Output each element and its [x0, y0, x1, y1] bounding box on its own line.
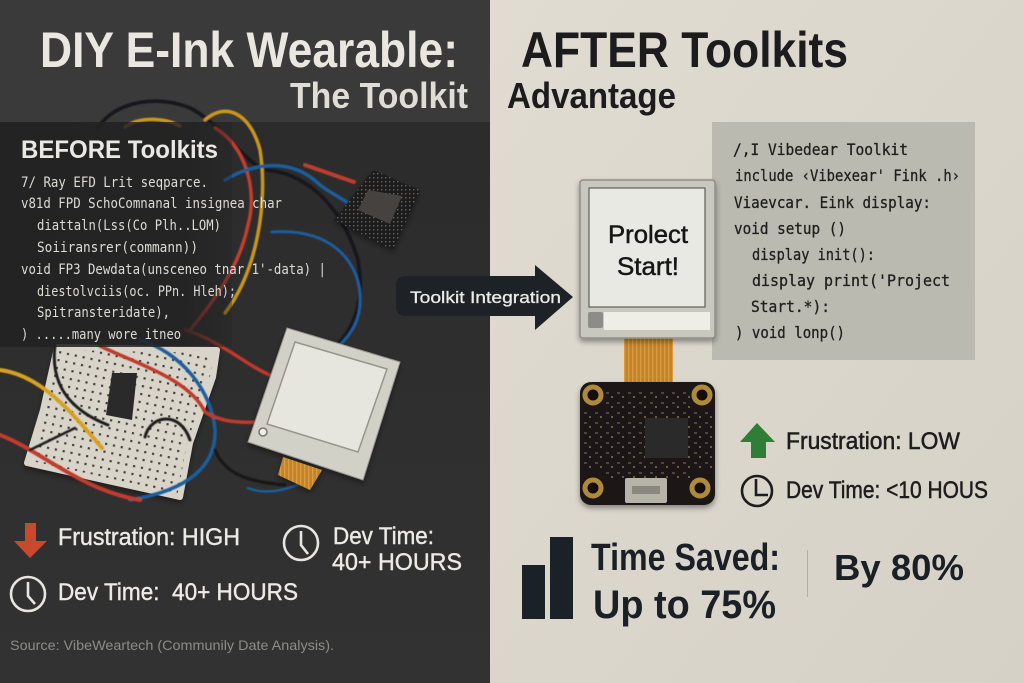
code lines: after: Start.*):	[751, 297, 830, 316]
code lines: after: include ‹Vibexear' Fink .h›	[735, 166, 960, 185]
title: AFTER Toolkits	[521, 22, 848, 78]
panel: after toolkits	[490, 0, 1024, 683]
arrow: toolkit integration: Toolkit Integration	[410, 288, 561, 307]
stat: time saved	[591, 537, 780, 627]
heading: before toolkits: BEFORE Toolkits	[21, 136, 218, 164]
icon: clock right	[284, 526, 318, 560]
code lines: after: Viaevcar. Eink display:	[734, 193, 931, 212]
screen text: Prolect	[608, 221, 688, 249]
code lines: before: diattaln(Lss(Co Plh..LOM)	[37, 218, 221, 234]
title: DIY E-Ink Wearable:	[40, 22, 458, 78]
code lines: before	[21, 175, 326, 343]
panel: before toolkits	[0, 0, 490, 683]
icon: clock	[742, 476, 772, 506]
title	[40, 22, 848, 116]
icon: red down arrow	[14, 523, 47, 558]
code lines: before: void FP3 Dewdata(unsceneo tnar 1'-data) |	[21, 262, 326, 278]
code lines: before: Spitransteridate),	[37, 305, 170, 321]
screen text	[608, 221, 688, 281]
title: The Toolkit	[290, 75, 468, 116]
screen text: Start!	[617, 253, 679, 281]
icon: clock left	[11, 577, 45, 611]
stat: frustration low: Frustration: LOW	[786, 428, 960, 455]
stat: dev time wrapped	[332, 523, 462, 576]
stat: time saved: Up to 75%	[593, 583, 776, 627]
stat: by 80 percent: By 80%	[834, 547, 964, 588]
code lines: before: diestolvciis(oc. PPn. Hleh);	[37, 284, 236, 300]
loose e-ink display	[248, 328, 400, 490]
arrow: toolkit integration	[396, 265, 573, 330]
code lines: before: v81d FPD SchoComnanal insignea char	[21, 196, 282, 212]
icon: bar chart	[522, 537, 573, 619]
code lines: before: ) .....many wore itneo	[21, 327, 181, 343]
e-ink display with message	[580, 180, 715, 338]
code lines: after: display init():	[752, 245, 875, 264]
stat: dev time low: Dev Time: <10 HOUS	[786, 477, 988, 504]
code lines: after: void setup ()	[734, 219, 846, 238]
tangled wires	[0, 101, 360, 500]
code lines: after: ) void lonp()	[735, 323, 845, 342]
code lines: before: 7/ Ray EFD Lrit seqparce.	[21, 175, 208, 191]
stat: dev time wrapped: Dev Time:	[333, 523, 434, 550]
breadboard	[27, 347, 217, 497]
code box: after	[712, 122, 975, 360]
stat: frustration high: Frustration: HIGH	[58, 524, 240, 551]
code lines: after	[733, 140, 960, 342]
code lines: before: Soiiransrer(commann))	[37, 240, 198, 256]
code lines: after: display print('Project	[752, 271, 950, 290]
icon: green up arrow	[740, 423, 775, 458]
flex ribbon	[624, 336, 673, 388]
source note: Source: VibeWeartech (Communily Date Analysis).	[10, 637, 334, 653]
controller board	[580, 382, 715, 505]
stat: time saved: Time Saved:	[591, 537, 780, 579]
stat: dev time wrapped: 40+ HOURS	[332, 549, 462, 576]
stat: dev time: Dev Time: 40+ HOURS	[58, 579, 298, 606]
code overlay: before	[0, 122, 326, 347]
title: Advantage	[507, 75, 676, 116]
code lines: after: /,I Vibedear Toolkit	[733, 140, 908, 159]
loose controller chip	[334, 170, 420, 250]
